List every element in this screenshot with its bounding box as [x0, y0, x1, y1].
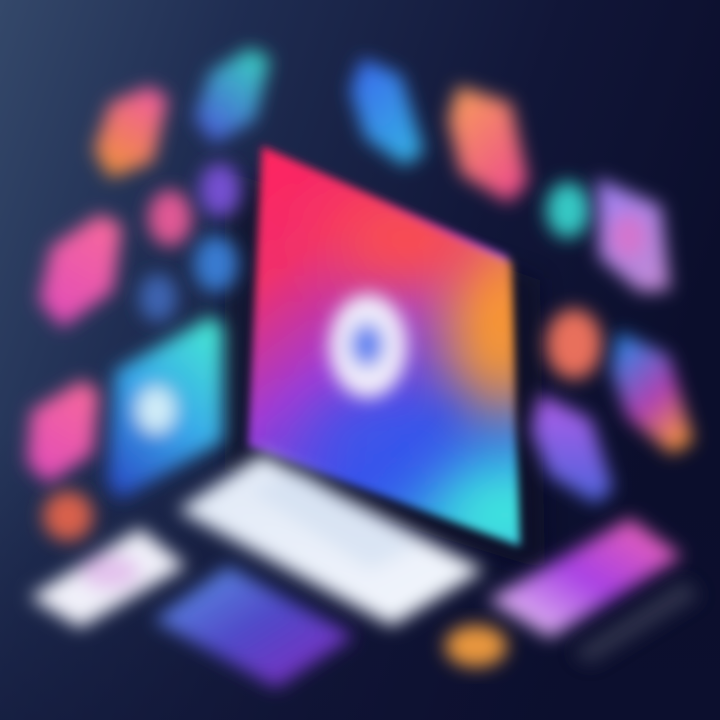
card: top left orange-pink [94, 86, 168, 178]
icon: small blue left [139, 274, 177, 322]
icon: teal circle [546, 182, 590, 238]
device: blue purple tablet [154, 566, 354, 688]
card: top orange-pink right [448, 86, 528, 203]
device: dark phone shadow right [572, 580, 700, 664]
card: video teal [107, 316, 223, 499]
card: right lilac [597, 178, 670, 292]
icon: small blue right [194, 236, 238, 292]
laptop screen [242, 140, 527, 551]
card: lower left pink [27, 380, 99, 484]
card: left pink [39, 214, 122, 328]
device: white phone left [30, 528, 186, 628]
card: top teal-blue [194, 48, 270, 144]
card: right gradient stack [611, 332, 693, 454]
icon: small purple [199, 163, 241, 217]
icon: small pink [148, 190, 192, 246]
icon: orange pink right [546, 309, 602, 379]
icon: small orange bottom [445, 625, 507, 667]
laptop keyboard base [178, 454, 484, 626]
dark shadow behind screen [225, 170, 545, 570]
device: pink phone right [488, 518, 682, 638]
card: top blue [350, 58, 424, 166]
icon: small orange left [43, 491, 93, 541]
card: right purple [531, 394, 613, 504]
icon: screen center logo [329, 294, 407, 398]
